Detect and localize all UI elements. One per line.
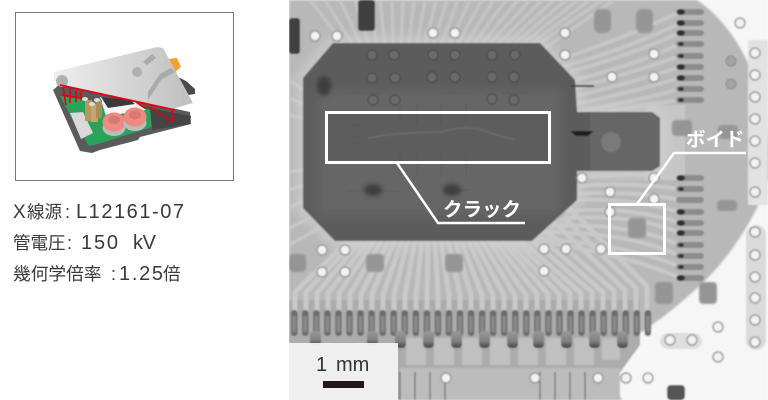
text block: geometric magnification spec: : [111, 264, 116, 284]
text block: tube voltage spec: : [67, 233, 72, 253]
text block: tube voltage spec: 管電圧 [13, 233, 66, 253]
text block: X-ray source spec [13, 201, 184, 223]
text block: tube voltage spec: 150 [81, 232, 118, 254]
dark solder marks in chip [317, 76, 461, 196]
right lead pads [676, 9, 704, 281]
through-hole vias [310, 18, 760, 383]
text block: tube voltage spec [13, 232, 157, 254]
trace fans around the chip [289, 0, 680, 318]
text block: tube voltage spec: kV [133, 232, 157, 254]
callout: crack [326, 112, 550, 223]
void label: ボイド [686, 129, 745, 151]
scale bar panel [289, 343, 398, 400]
text block: geometric magnification spec: 倍 [163, 264, 180, 284]
panel: device thumbnail [16, 12, 234, 180]
scale label [316, 354, 369, 376]
callout: void [610, 129, 746, 254]
light halo around chip [303, 43, 660, 241]
crack line [368, 128, 515, 140]
scale bar [323, 381, 364, 388]
text block: X-ray source spec: 線源 [27, 202, 62, 222]
text block: X-ray source spec: : [65, 202, 70, 222]
bottom lead pads [289, 308, 654, 338]
scale label: 1 [316, 354, 327, 376]
dark components [289, 18, 300, 54]
scale label: mm [336, 354, 369, 376]
text block: geometric magnification spec: 1.25 [119, 263, 163, 285]
text block: geometric magnification spec [13, 263, 180, 285]
icon: device illustration [53, 47, 195, 153]
X-ray base texture [289, 0, 768, 400]
text block: geometric magnification spec: 幾何学倍率 [13, 264, 101, 284]
chip package [303, 43, 660, 241]
square via pads [289, 9, 738, 304]
text block: X-ray source spec: L12161-07 [76, 201, 184, 223]
text block: X-ray source spec: X [13, 202, 26, 223]
crack label: クラック [443, 199, 521, 221]
panel: X-ray image [289, 0, 768, 400]
